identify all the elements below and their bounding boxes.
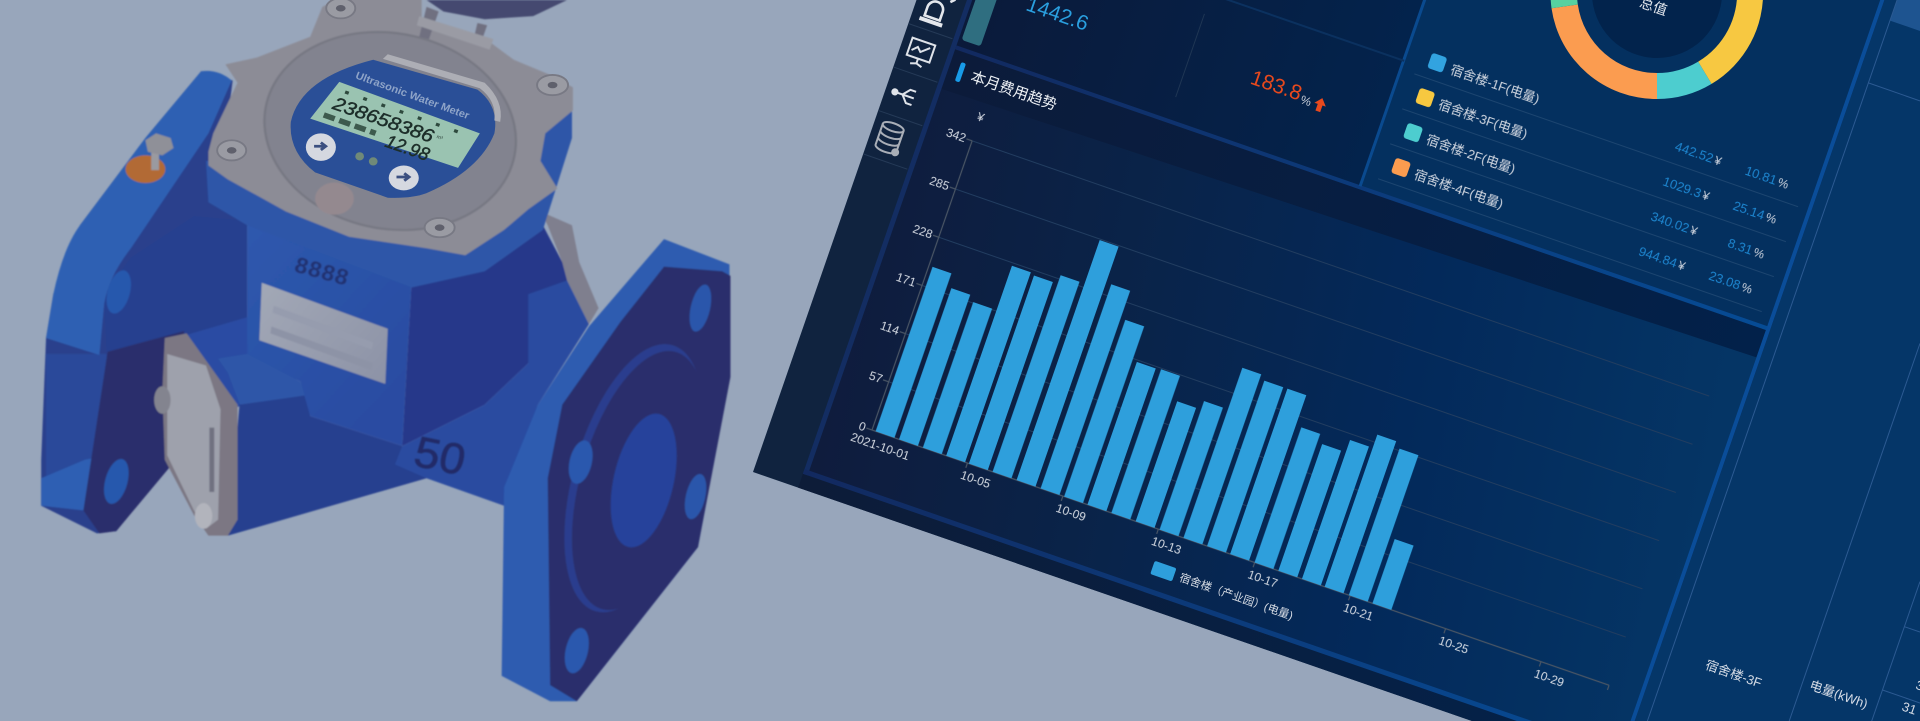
donut chart	[1551, 0, 1763, 99]
row: 1F: 442.52	[1673, 139, 1716, 166]
y axis unit: ¥	[974, 109, 986, 125]
segment: 4F orange	[1552, 4, 1657, 99]
y axis labels: 342	[944, 125, 968, 145]
right flange	[502, 239, 731, 701]
icon: monitor chart	[904, 38, 935, 69]
upper statistics panel	[962, 0, 1341, 160]
row: 4F: ¥	[1675, 258, 1687, 274]
row: 3F: 1029.3	[1661, 174, 1703, 201]
size marking 50: 50	[410, 428, 470, 485]
right side plate	[540, 212, 599, 324]
growth value: 183.8	[1248, 66, 1305, 105]
row: 2F: 宿舍楼-2F(电量)	[1424, 132, 1517, 177]
panel title accent	[955, 62, 966, 83]
upper left panel background	[956, 0, 1425, 186]
y axis labels	[844, 125, 968, 434]
donut legend table	[1378, 49, 1807, 312]
percent sign: %	[1299, 93, 1314, 109]
LCD screen	[310, 82, 480, 168]
x axis labels: 10-25	[1437, 634, 1471, 657]
table header: dormitory floor: 宿舍楼-3F	[1704, 657, 1764, 691]
frame lines	[803, 0, 1884, 721]
LCD icon row	[345, 92, 471, 137]
row: 3F: ¥	[1699, 188, 1712, 204]
display panel	[291, 54, 501, 198]
panel title: 本月费用趋势	[968, 68, 1059, 114]
segment: 3F yellow	[1698, 0, 1763, 84]
dashboard screen	[753, 0, 1920, 721]
row: 4F	[1390, 157, 1755, 298]
row: 3F	[1415, 88, 1779, 228]
x axis labels: 10-29	[1532, 667, 1566, 690]
chart legend	[1150, 561, 1295, 623]
row: 3F: 25.14	[1731, 198, 1767, 223]
right panel background	[1635, 0, 1920, 721]
row: 1F: 10.81	[1743, 163, 1779, 188]
y axis labels: 57	[867, 369, 885, 386]
left flange	[41, 71, 247, 533]
icon: up arrow	[1312, 96, 1328, 113]
left end plate	[154, 333, 238, 536]
icon: database	[874, 120, 908, 157]
x axis labels	[849, 430, 1566, 690]
y axis labels: 285	[928, 174, 951, 193]
row: 4F: 宿舍楼-4F(电量)	[1412, 167, 1505, 212]
row: 1F: 宿舍楼-1F(电量)	[1449, 62, 1541, 107]
row: 2F: %	[1752, 245, 1767, 262]
right button	[389, 166, 419, 190]
hinge and lid	[417, 0, 567, 50]
chart panel background	[809, 46, 1769, 721]
meter brand text: Ultrasonic Water Meter	[354, 70, 472, 122]
sidebar separators	[864, 24, 952, 169]
emboss digits: 8888	[292, 252, 353, 290]
metal head	[208, 0, 573, 255]
row: 2F: ¥	[1687, 223, 1699, 239]
row: 4F: 944.84	[1637, 244, 1679, 271]
segment: 2F teal	[1657, 62, 1712, 99]
bars	[876, 191, 1474, 610]
grid lines	[889, 141, 1709, 637]
icon: share nodes	[890, 84, 916, 105]
flow rate digits: 12.98	[382, 132, 433, 166]
segment: green	[1551, 0, 1578, 8]
table header: consumption: 电量(kWh)	[1808, 677, 1870, 711]
row: 1F: ¥	[1712, 153, 1724, 169]
total flow digits: 238658386	[329, 94, 437, 148]
x axis labels: 10-05	[959, 468, 993, 491]
unit labels: m³	[436, 134, 444, 142]
row separators	[1378, 74, 1798, 312]
inner disc	[1592, 0, 1722, 58]
donut panel background	[1361, 0, 1882, 328]
row: 4F: 23.08	[1707, 268, 1742, 293]
grounding lug	[126, 133, 174, 183]
illustration: ultrasonic water meter	[41, 0, 731, 701]
row: 2F: 8.31	[1726, 235, 1755, 258]
y axis labels: 171	[894, 270, 918, 290]
status LEDs	[355, 152, 378, 166]
title band	[941, 49, 1766, 357]
row: 2F	[1403, 123, 1767, 263]
x axis labels: 2021-10-01	[849, 430, 912, 463]
row: 1F	[1427, 53, 1791, 193]
x axis labels: 10-09	[1054, 501, 1088, 524]
row: 3F: 宿舍楼-3F(电量)	[1436, 97, 1529, 142]
cover screws	[217, 0, 568, 237]
teal progress bar	[962, 0, 1004, 46]
pipe body	[184, 317, 427, 536]
row: 1F: %	[1776, 175, 1791, 192]
x axis labels: 10-17	[1246, 567, 1280, 591]
blue collar	[206, 101, 572, 287]
row: 2F: 340.02	[1649, 209, 1691, 236]
panel divider	[1176, 14, 1204, 97]
right panel table lines	[1647, 0, 1920, 721]
meter stem	[247, 216, 589, 506]
row: 4F: %	[1739, 280, 1754, 297]
LCD small labels	[324, 115, 376, 133]
axes	[865, 139, 1709, 690]
table value fragment: 31	[1900, 699, 1919, 718]
y axis labels: 0	[857, 419, 868, 434]
bar chart	[840, 102, 1720, 704]
chart legend: 宿舍楼（产业园）(电量)	[1178, 570, 1295, 623]
name plate	[259, 283, 388, 384]
x axis labels: 10-13	[1150, 534, 1183, 557]
outer bezel strip	[753, 0, 1920, 721]
x axis labels: 10-21	[1341, 600, 1375, 624]
right header band	[1890, 0, 1920, 31]
y axis labels: 228	[911, 222, 935, 242]
y axis labels: 114	[878, 318, 901, 338]
left button	[306, 133, 336, 161]
row: 3F: %	[1764, 210, 1779, 227]
icon: alarm siren	[915, 0, 957, 29]
bottom strip	[798, 472, 1523, 721]
